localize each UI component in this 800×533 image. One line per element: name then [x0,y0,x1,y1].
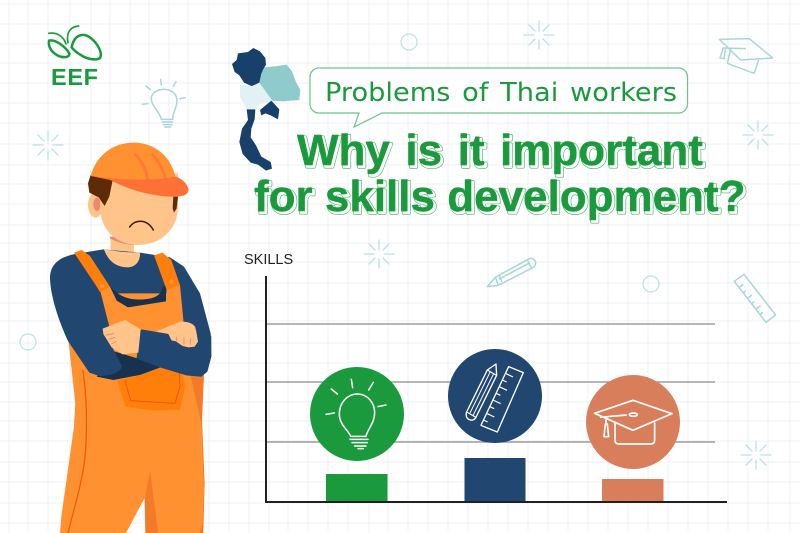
logo mark [49,26,101,59]
hair [88,175,113,206]
hat dome [91,143,176,183]
icon: pale pencil [487,258,536,287]
left arm [50,254,122,376]
neck skin [104,249,140,267]
title line 2: for skills development? [256,174,747,223]
map: central region [240,83,272,109]
straps [74,250,110,292]
shirt [75,249,211,377]
map: east region [260,101,279,119]
bib fill [100,285,184,331]
icon: graduation cap badge [586,375,680,469]
hat brim [91,176,189,197]
logo wordmark: EEF [51,64,98,90]
title line 1: Why is it important [299,128,705,177]
strap buttons [100,284,104,288]
right fingers [170,330,198,347]
axes [266,276,727,502]
overalls crease [68,370,86,533]
title line 1: Why is it important [297,126,703,175]
map: northeast region [259,65,300,101]
hat ridges [135,153,166,182]
map of Thailand [232,48,300,171]
right arm sleeve [137,313,211,377]
left hand [103,320,141,354]
arm shadow [97,351,161,380]
title line 2: for skills development? [254,172,745,221]
icon: lightbulb badge [310,367,404,461]
bubble outline [310,68,688,127]
worker body [50,237,211,533]
map: north region [232,48,266,87]
map: south region [239,109,272,171]
decorative sparkles [33,21,773,469]
title [254,126,747,223]
title line 1: Why is it important [299,128,705,177]
bar: green [326,474,388,501]
overalls [60,253,204,533]
logo: EEF [49,26,101,90]
frown [130,221,153,230]
leg shadow [145,373,205,533]
icon: pencil and ruler badge [448,349,542,443]
bar chart: skills [244,252,727,502]
pocket [117,367,185,411]
icon: pale ruler [734,274,776,322]
neck band [110,237,134,245]
neckline shadow [108,283,166,307]
pocket stitch [125,373,180,403]
face [100,173,178,245]
title line 2: for skills development? [256,174,747,223]
axis label: SKILLS [244,252,293,268]
right hand [156,322,198,347]
ear [88,192,103,218]
icon: pale lightbulb [142,79,185,127]
finger lines [106,333,191,345]
gridlines [266,324,715,442]
subtitle: Problems of Thai workers [325,78,677,108]
bar: terracotta [602,479,664,501]
worker character [50,143,211,533]
decorative circles [20,34,659,350]
speech bubble [310,68,688,127]
worker head [88,143,189,245]
icon: pale graduation cap [719,39,773,73]
bar: navy [464,458,526,501]
neck skin upper [111,239,134,253]
